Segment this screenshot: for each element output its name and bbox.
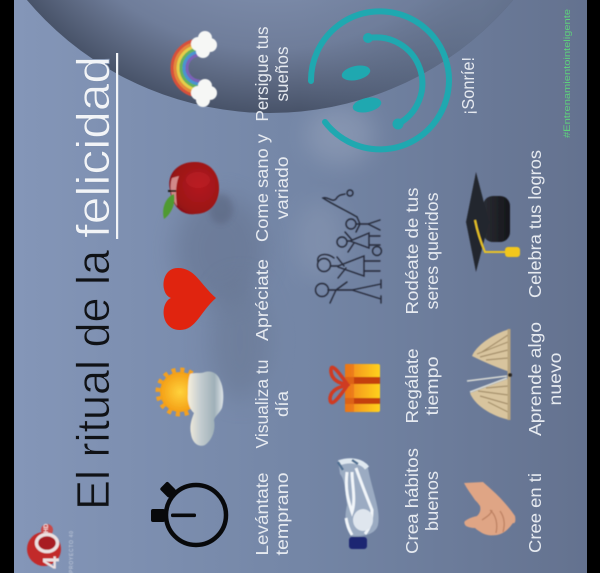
- label: Persigue tus sueños: [252, 26, 292, 122]
- icon: graduation cap: [466, 172, 520, 272]
- title: [67, 53, 119, 510]
- label: Visualiza tu día: día: [272, 391, 292, 417]
- label: Rodéate de tus seres queridos: seres queridos: [422, 192, 442, 310]
- label: Crea hábitos buenos: [402, 448, 442, 554]
- label: Visualiza tu día: [252, 360, 292, 448]
- label: Apréciate: Apréciate: [252, 259, 272, 341]
- label: Persigue tus sueños: sueños: [272, 46, 292, 102]
- icon: smiley: [311, 11, 449, 149]
- label: Crea hábitos buenos: buenos: [422, 471, 442, 531]
- label: Regálate tiempo: Regálate: [402, 348, 422, 424]
- label: Regálate tiempo: tiempo: [422, 357, 442, 415]
- icon: apple: [163, 162, 233, 224]
- icon: rainbow between clouds: [172, 31, 217, 107]
- icon: sun and cloud: [158, 370, 223, 446]
- icon: stopwatch: [151, 481, 226, 545]
- title: felicidad: [67, 56, 119, 238]
- logo: 4C HD: HD: [43, 523, 50, 533]
- label: Aprende algo nuevo: [525, 322, 565, 436]
- label: Aprende algo nuevo: Aprende algo: [525, 322, 545, 436]
- label: Rodéate de tus seres queridos: [402, 187, 442, 314]
- icon: hand pointing: [464, 482, 515, 535]
- label: Levántate temprano: temprano: [272, 473, 292, 555]
- label: Celebra tus logros: Celebra tus logros: [525, 150, 545, 298]
- label: Rodéate de tus seres queridos: Rodéate de tus: [402, 187, 422, 314]
- icon: water bottle: [338, 458, 379, 549]
- label: Come sano y variado: [252, 134, 292, 242]
- label: Regálate tiempo: [402, 348, 442, 424]
- icon: heart: [164, 268, 216, 330]
- hashtag: #Entrenamientointeligente: [562, 9, 572, 138]
- label: Persigue tus sueños: Persigue tus: [252, 26, 272, 122]
- icon: open book: [467, 329, 512, 420]
- label: Cree en ti: Cree en ti: [525, 473, 545, 553]
- label: Levántate temprano: Levántate: [252, 472, 272, 556]
- logo: 4C HD: 4: [38, 556, 64, 569]
- title: El ritual de la: [67, 250, 119, 510]
- icon: gift: [330, 364, 380, 412]
- label: Visualiza tu día: Visualiza tu: [252, 360, 272, 448]
- label: Come sano y variado: Come sano y: [252, 134, 272, 242]
- icon: stick figure family: [316, 190, 382, 303]
- label: Levántate temprano: [252, 472, 292, 556]
- label: Crea hábitos buenos: Crea hábitos: [402, 448, 422, 554]
- label: Aprende algo nuevo: nuevo: [545, 352, 565, 406]
- logo: 4C HD: PROYECTO 40: [69, 530, 75, 573]
- label: Come sano y variado: variado: [272, 157, 292, 219]
- label: Sonríe: ¡Sonríe!: [458, 57, 478, 115]
- logo: 4C HD: [27, 523, 75, 573]
